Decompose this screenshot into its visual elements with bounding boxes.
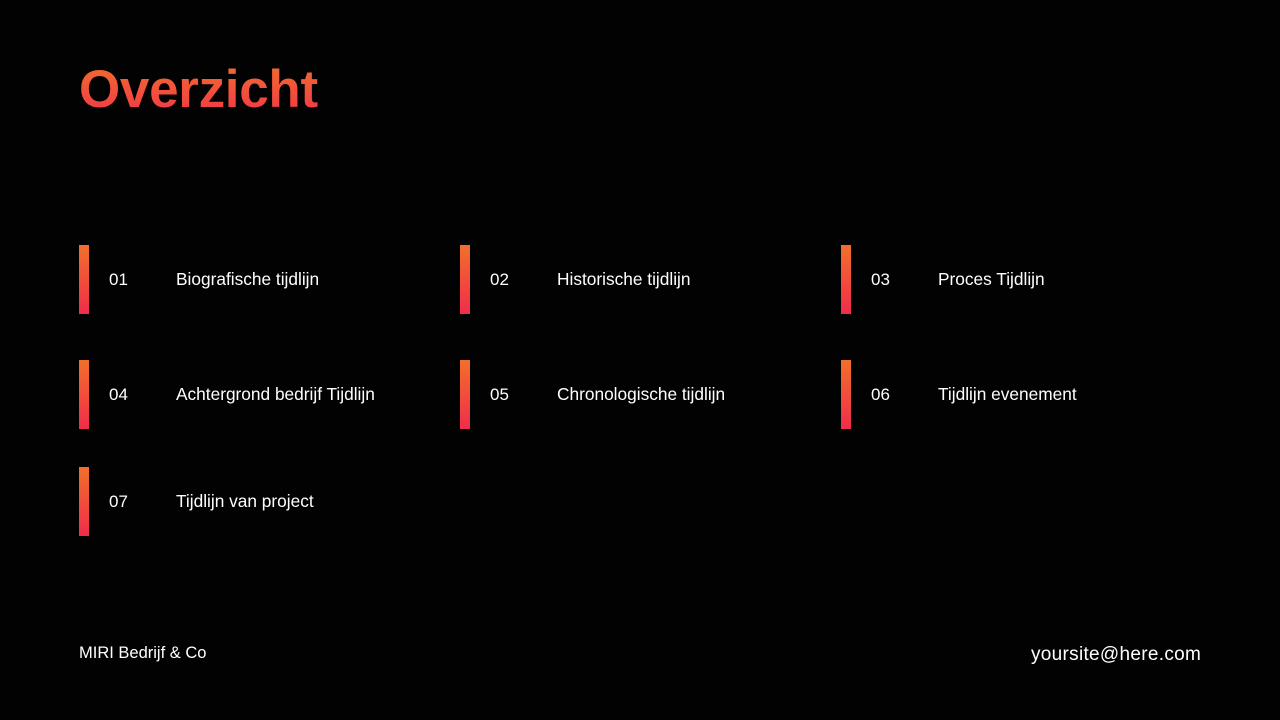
item 03: Proces Tijdlijn <box>938 269 1045 289</box>
item 02: Historische tijdlijn <box>557 269 690 289</box>
item 05: 05 <box>490 385 509 404</box>
item 01 <box>79 245 319 314</box>
item 03 <box>841 245 1045 314</box>
item 01: Biografische tijdlijn <box>176 269 319 289</box>
item 01: 01 <box>109 270 128 289</box>
footer company: MIRI Bedrijf & Co <box>79 644 206 662</box>
item 02: 02 <box>490 270 509 289</box>
footer website: yoursite@here.com <box>1031 644 1201 665</box>
item 06: Tijdlijn evenement <box>938 384 1077 404</box>
item 04 <box>79 360 375 429</box>
item 05 <box>460 360 725 429</box>
item 07: Tijdlijn van project <box>176 491 314 511</box>
item 05: Chronologische tijdlijn <box>557 384 725 404</box>
item 04: 04 <box>109 385 128 404</box>
item 02 <box>460 245 690 314</box>
item 03: 03 <box>871 270 890 289</box>
title: Overzicht <box>79 60 318 119</box>
item 04: Achtergrond bedrijf Tijdlijn <box>176 384 375 404</box>
item 06: 06 <box>871 385 890 404</box>
item 07: 07 <box>109 492 128 511</box>
item 06 <box>841 360 1077 429</box>
item 07 <box>79 467 314 536</box>
